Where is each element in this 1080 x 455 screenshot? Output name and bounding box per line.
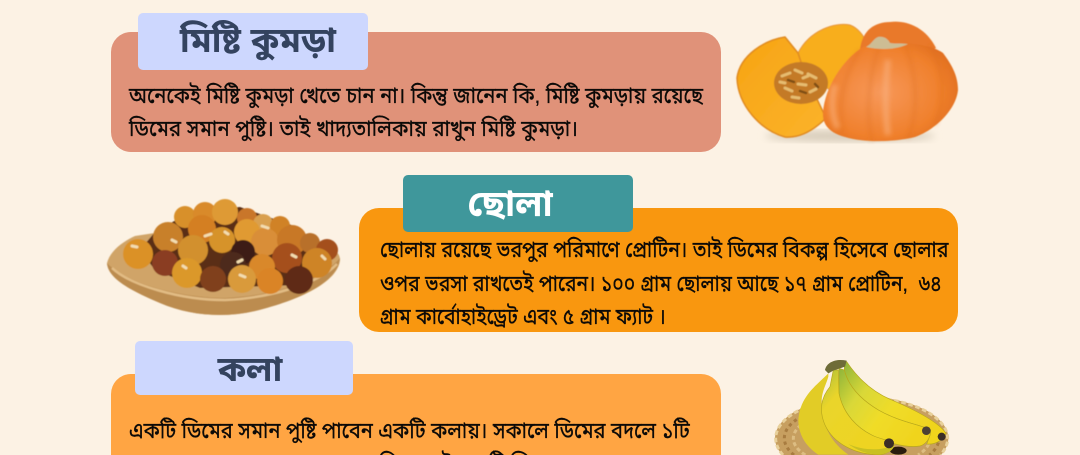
heading: banana: কলা xyxy=(218,350,282,389)
text: banana description: একটি ডিমের সমান পুষ্টি পাবেন একটি কলায়। সকালে ডিমের বদলে ১টি xyxy=(129,418,690,443)
illustration: chickpeas in wooden bowl xyxy=(106,198,341,316)
heading: banana xyxy=(135,341,353,395)
text: chickpeas description: গ্রাম কার্বোহাইড্রেট এবং ৫ গ্রাম ফ্যাট । xyxy=(380,304,666,329)
panel: chickpeas xyxy=(359,208,958,332)
heading: chickpeas xyxy=(403,175,633,232)
text: sweet pumpkin description: ডিমের সমান পুষ্টি। তাই খাদ্যতালিকায় রাখুন মিষ্টি কুমড়া। xyxy=(129,116,578,141)
heading: chickpeas: ছোলা xyxy=(467,183,553,224)
panel: sweet pumpkin xyxy=(111,32,721,152)
text: chickpeas description: ওপর ভরসা রাখতেই পারেন। ১০০ গ্রাম ছোলায় আছে ১৭ গ্রাম প্রোটিন, ৬৪ xyxy=(380,270,942,296)
heading: sweet pumpkin: মিষ্টি কুমড়া xyxy=(180,21,336,60)
illustration: pumpkin xyxy=(736,20,959,144)
text: banana description xyxy=(129,417,690,455)
illustration: bananas in basket xyxy=(774,360,950,455)
text: chickpeas description: ছোলায় রয়েছে ভরপুর পরিমাণে প্রোটিন। তাই ডিমের বিকল্প হিসেবে ছোলার xyxy=(380,237,948,262)
panel: banana xyxy=(111,374,721,455)
heading: sweet pumpkin xyxy=(138,13,368,70)
text: sweet pumpkin description: অনেকেই মিষ্টি কুমড়া খেতে চান না। কিন্তু জানেন কি, মিষ্টি কুমড়ায় রয়েছে xyxy=(129,83,703,108)
text: chickpeas description xyxy=(380,236,949,329)
text: sweet pumpkin description xyxy=(128,82,704,142)
